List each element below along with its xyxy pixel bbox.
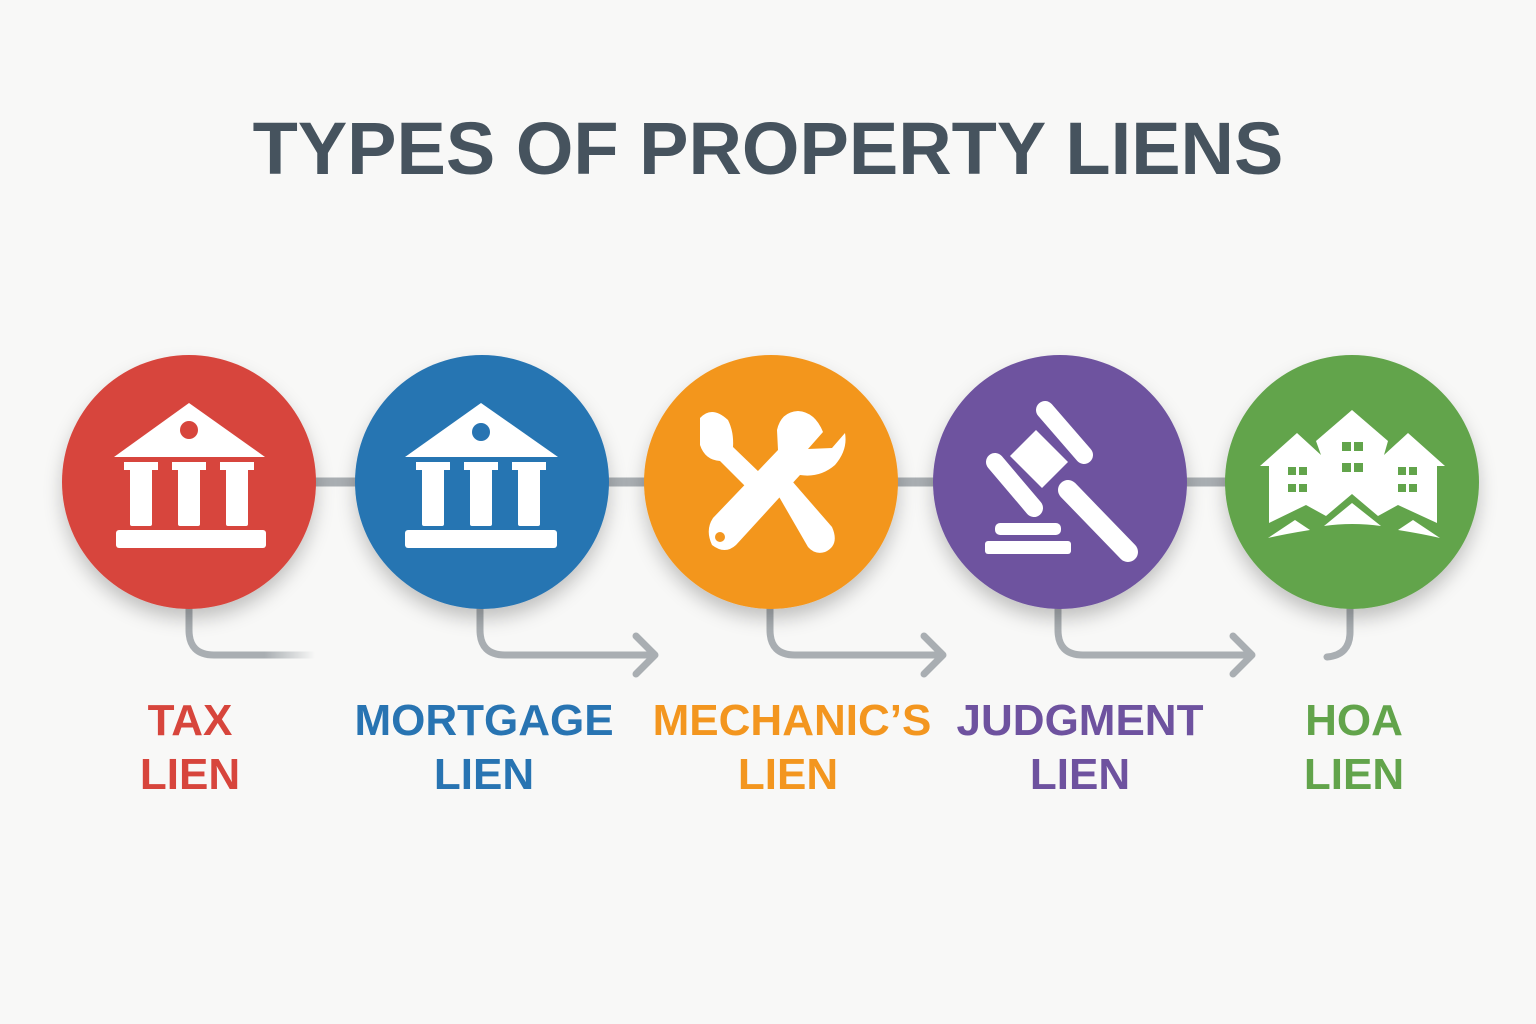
title: TYPES OF PROPERTY LIENS — [253, 107, 1283, 190]
circle: mortgage lien — [355, 355, 609, 609]
label: mechanic's lien: LIEN — [738, 750, 838, 799]
label: judgment lien — [957, 696, 1204, 799]
connector line between circles — [300, 478, 1240, 486]
label: mortgage lien: LIEN — [434, 750, 534, 799]
label: hoa lien — [1304, 696, 1404, 799]
icon: bank — [405, 403, 558, 548]
label: mortgage lien — [354, 696, 614, 799]
circle: judgment lien — [933, 355, 1187, 609]
label: judgment lien: LIEN — [1030, 750, 1130, 799]
label: tax lien — [140, 696, 240, 799]
icon: courthouse — [114, 403, 266, 548]
label: mechanic's lien: MECHANIC’S — [653, 696, 931, 745]
circle: mechanic's lien — [644, 355, 898, 609]
label: mechanic's lien — [653, 696, 931, 799]
icon: houses — [1260, 410, 1445, 538]
icon: tools — [700, 411, 846, 553]
label: judgment lien: JUDGMENT — [957, 696, 1204, 745]
label: tax lien: LIEN — [140, 750, 240, 799]
label: hoa lien: LIEN — [1304, 750, 1404, 799]
label: tax lien: TAX — [148, 696, 232, 745]
label: hoa lien: HOA — [1305, 696, 1403, 745]
icon: gavel — [985, 410, 1128, 554]
arrows — [189, 608, 1350, 674]
circle: hoa lien — [1225, 355, 1479, 609]
circle: tax lien — [62, 355, 316, 609]
label: mortgage lien: MORTGAGE — [354, 696, 614, 745]
